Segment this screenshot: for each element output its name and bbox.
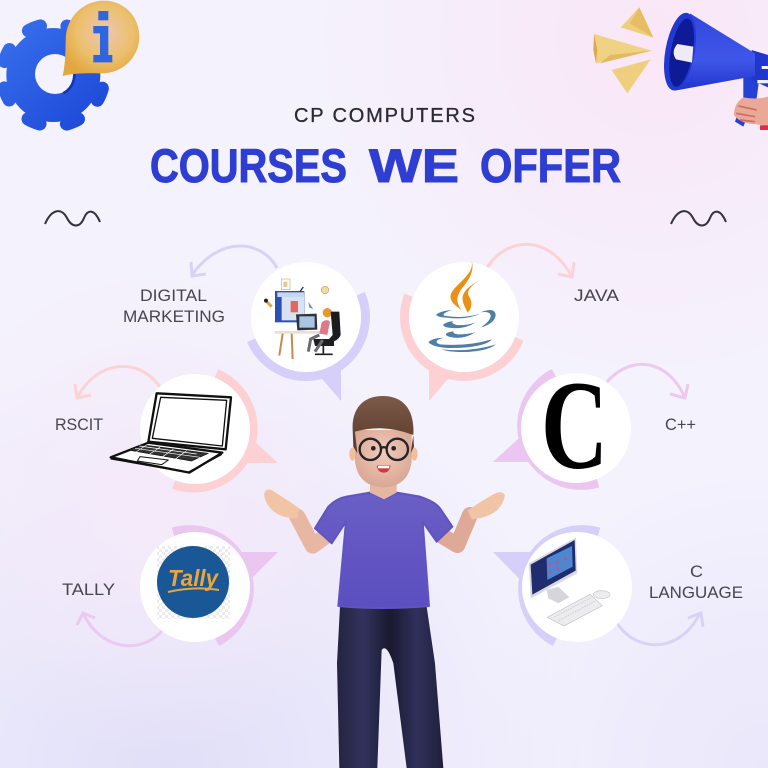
face bbox=[355, 430, 412, 487]
icon: desktop computer bbox=[529, 537, 610, 626]
panel: rscit bbox=[75, 366, 278, 488]
icon: letter C: C bbox=[541, 356, 608, 496]
arrow: c language bbox=[617, 613, 703, 645]
bubble ring: java bbox=[404, 262, 519, 401]
glasses bbox=[360, 439, 408, 460]
mouth bbox=[377, 466, 391, 473]
logo: tally bbox=[157, 546, 230, 619]
decorative squiggle right bbox=[671, 211, 726, 226]
trousers bbox=[337, 607, 443, 768]
shirt bbox=[315, 493, 452, 608]
arrow: java bbox=[487, 244, 574, 277]
label: java: JAVA bbox=[574, 286, 620, 305]
character: man with glasses shrugging bbox=[264, 396, 505, 768]
bubble ring: rscit bbox=[140, 374, 278, 488]
panel: c language bbox=[493, 530, 703, 645]
icon: hand bbox=[734, 97, 768, 130]
label: digital marketing: DIGITAL bbox=[140, 286, 207, 305]
icon: megaphone with hand bbox=[593, 7, 768, 130]
icon: java cup bbox=[428, 261, 496, 352]
arrow: rscit bbox=[75, 366, 160, 398]
panel: java bbox=[404, 244, 574, 401]
bubble ring: tally bbox=[140, 530, 278, 642]
icon: designer at desk bbox=[264, 279, 341, 359]
label: c language line 2: LANGUAGE bbox=[649, 583, 743, 602]
icon: gear bbox=[3, 24, 104, 126]
label: tally: TALLY bbox=[62, 580, 115, 599]
decorative squiggle left bbox=[45, 211, 100, 226]
neck bbox=[370, 480, 397, 499]
right arm and hand bbox=[443, 492, 505, 545]
hair bbox=[353, 396, 413, 453]
icon: megaphone body bbox=[659, 10, 768, 127]
arrow: digital marketing bbox=[191, 246, 277, 276]
label: rscit: RSCIT bbox=[55, 415, 103, 434]
title: COURSES bbox=[150, 139, 347, 192]
arrow: tally bbox=[77, 613, 162, 646]
logo: tally: Tally bbox=[168, 565, 219, 591]
bubble ring: c language bbox=[493, 530, 632, 642]
title: WE bbox=[369, 139, 459, 192]
panel: tally bbox=[77, 530, 278, 646]
arrow: c++ bbox=[607, 364, 688, 398]
title: OFFER bbox=[480, 139, 621, 192]
ears bbox=[349, 447, 356, 461]
subtitle: CP COMPUTERS bbox=[294, 105, 475, 127]
bubble ring: digital marketing bbox=[251, 262, 366, 401]
eyes bbox=[371, 446, 376, 451]
left arm and hand bbox=[264, 490, 325, 546]
label: c++: C++ bbox=[665, 415, 696, 434]
bubble ring: c++ bbox=[493, 373, 631, 485]
icon: laptop bbox=[111, 393, 231, 473]
icon: blue gear with info bubble bbox=[3, 1, 139, 126]
icon: yellow rays bbox=[593, 7, 653, 93]
label: c language line 1: C bbox=[690, 562, 703, 581]
label: marketing: MARKETING bbox=[123, 307, 225, 326]
title bbox=[150, 139, 621, 192]
panel: digital marketing bbox=[191, 246, 366, 401]
icon: info speech bubble bbox=[63, 1, 139, 76]
panel: c++ bbox=[493, 356, 688, 496]
